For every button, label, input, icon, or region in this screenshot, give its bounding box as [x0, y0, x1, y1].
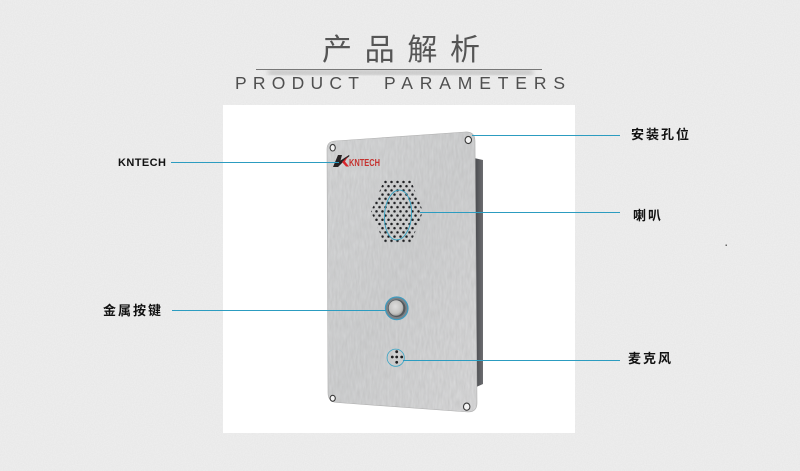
callout: 喇叭: 喇叭	[633, 208, 661, 223]
microphone	[387, 349, 404, 366]
callout: 安装孔位: 安装孔位	[631, 127, 689, 142]
callout: KNTECH: KNTECH	[118, 157, 166, 169]
title	[235, 34, 565, 93]
logo: KNTECH	[333, 155, 380, 169]
heading: English subtitle: PRODUCT	[235, 73, 359, 93]
speaker grille	[370, 180, 424, 244]
heading: English subtitle	[235, 73, 565, 93]
panel: product photo on white	[223, 105, 575, 433]
heading: Chinese title: 产品解析	[322, 34, 480, 67]
device rear housing	[474, 158, 483, 388]
heading: English subtitle: PARAMETERS	[384, 73, 565, 93]
icon: mounting holes	[330, 136, 471, 410]
heading rule with shadow	[256, 69, 542, 75]
callout: 麦克风: 麦克风	[628, 351, 671, 366]
logo: KNTECH: KNTECH	[349, 158, 380, 169]
device faceplate	[325, 130, 479, 414]
callout: 金属按键: 金属按键	[103, 303, 161, 318]
metal button	[385, 297, 408, 320]
